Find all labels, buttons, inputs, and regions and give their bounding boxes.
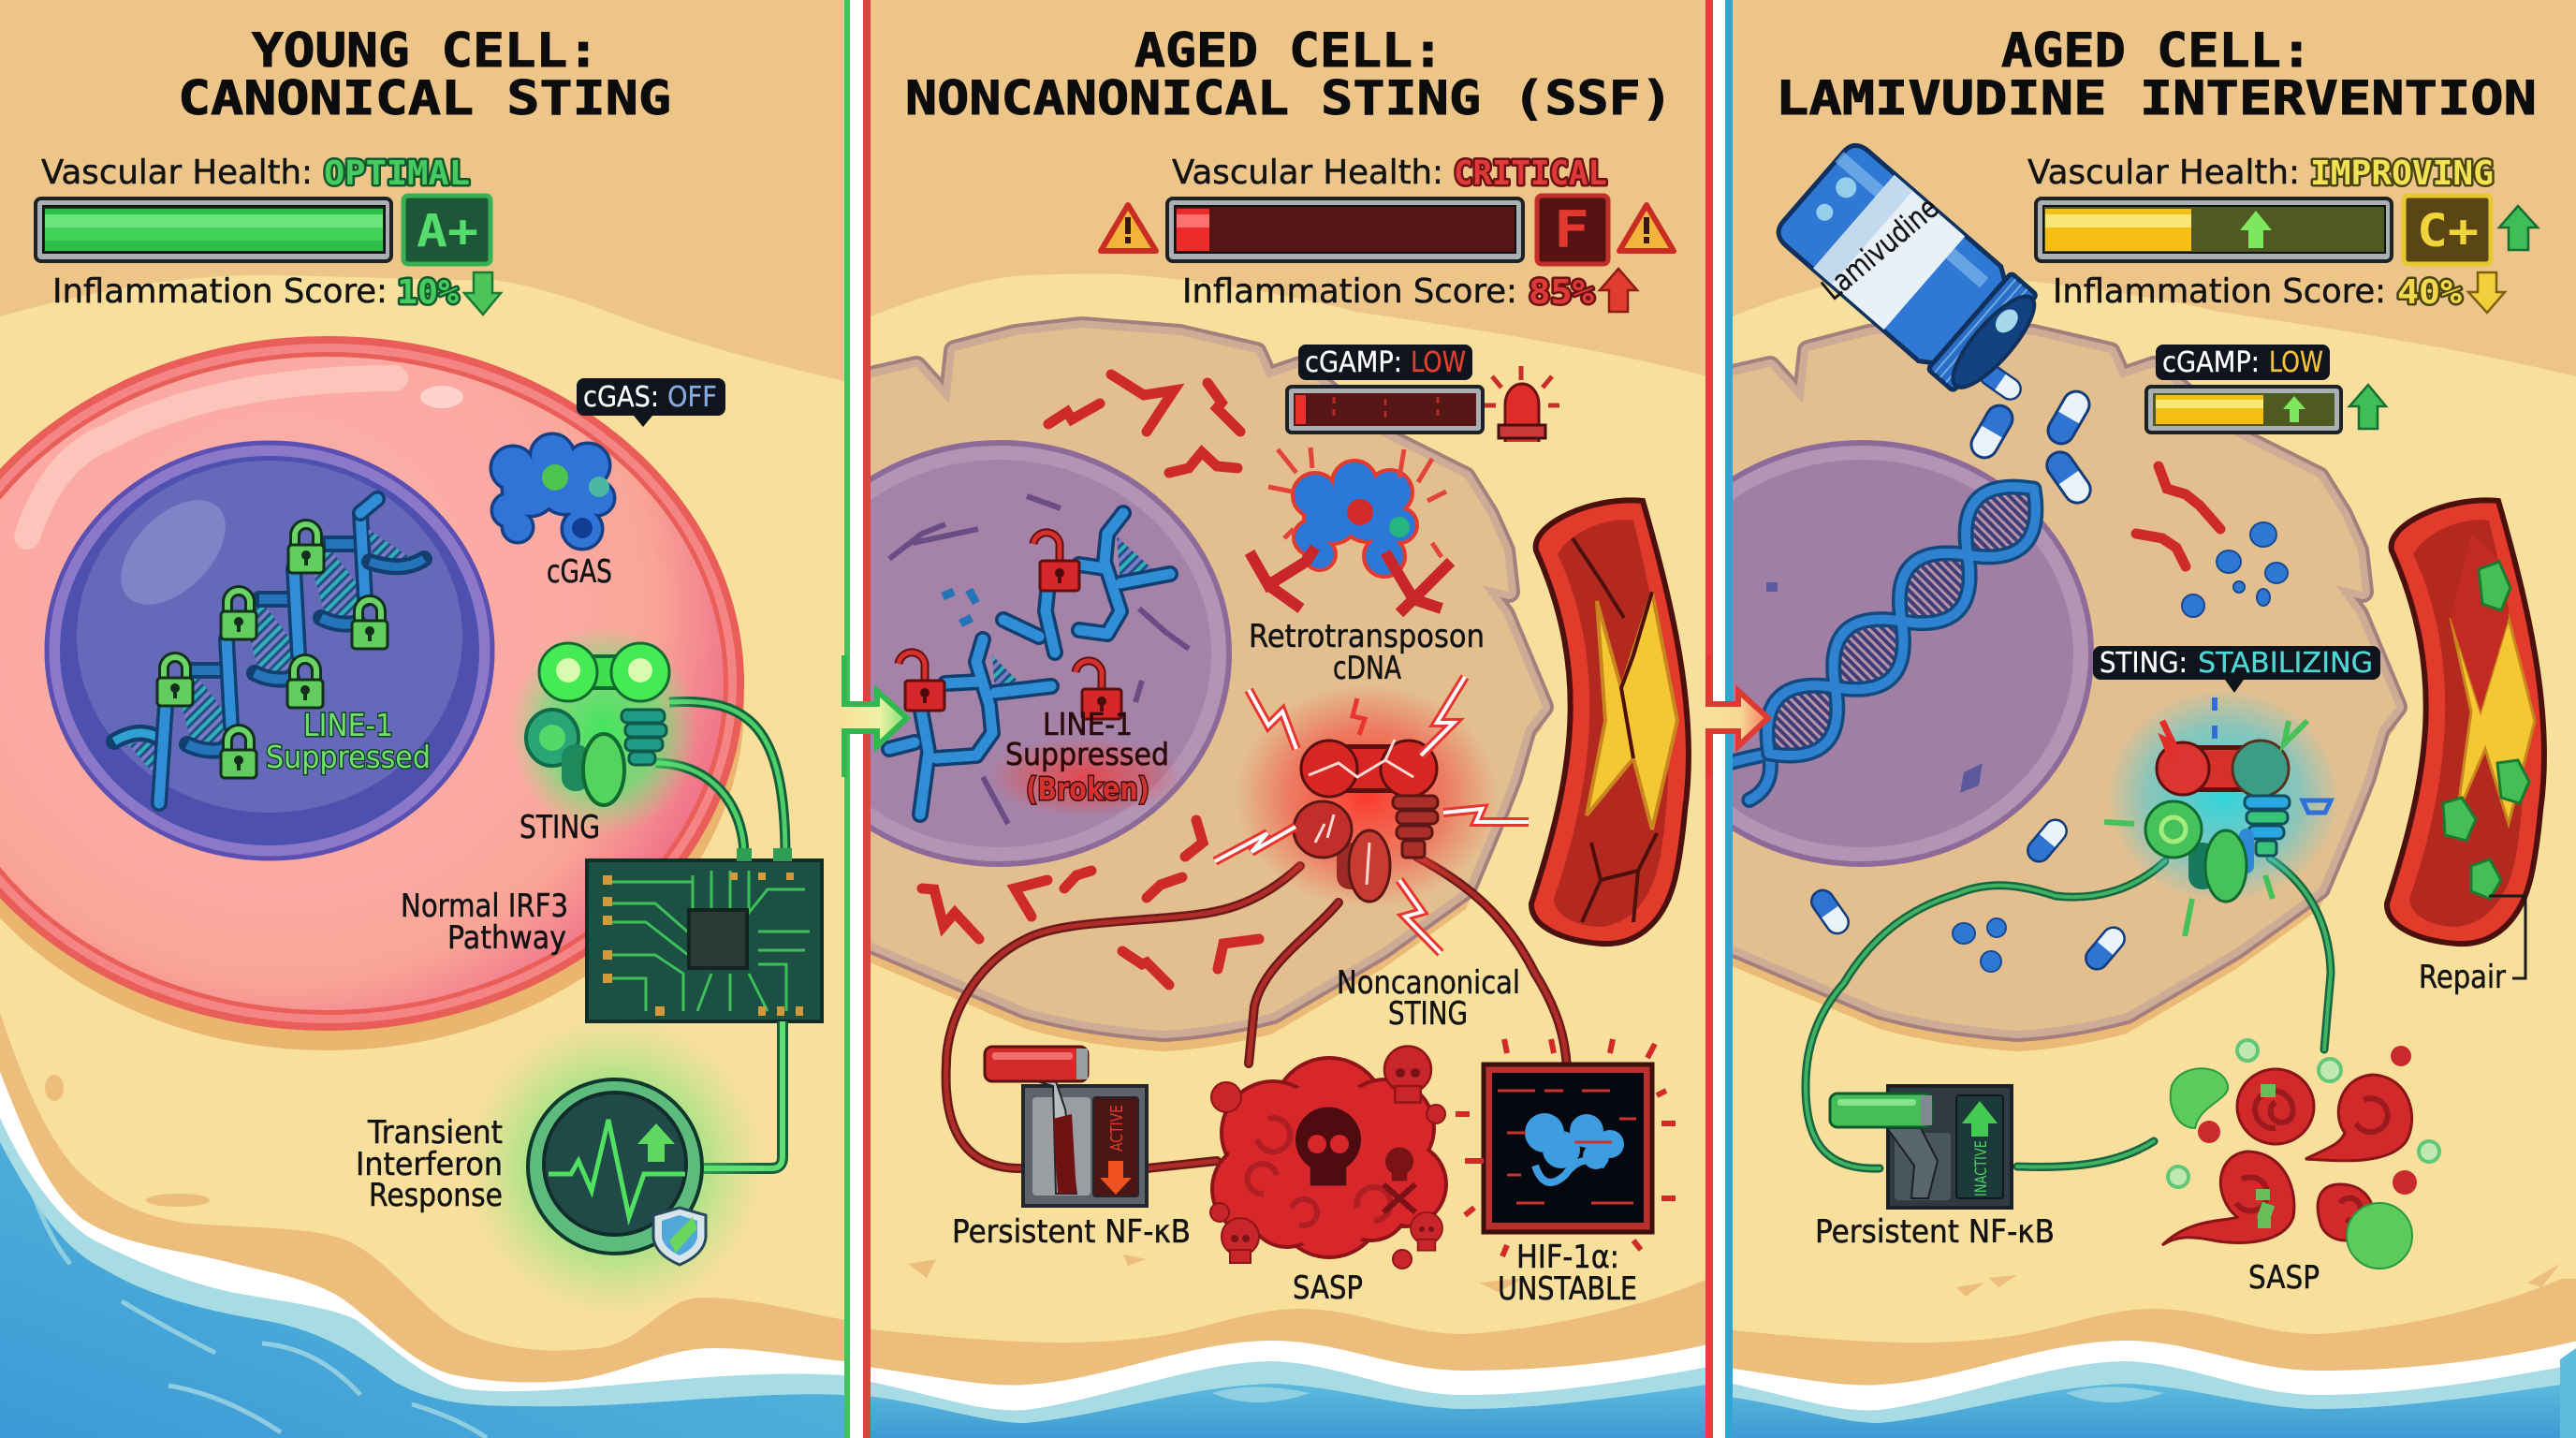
arrow: health up xyxy=(2499,206,2538,250)
tooltip: cGAMP low: cGAMP: xyxy=(1305,346,1402,379)
label: Normal IRF3 Pathway: Pathway xyxy=(447,919,566,957)
icon: SASP dissolving swirls xyxy=(2162,1040,2439,1269)
icon: interferon heartbeat monitor xyxy=(475,1022,756,1307)
label: Noncanonical STING: STING xyxy=(1388,995,1468,1033)
icon: STING active xyxy=(510,625,697,835)
health bar: full green xyxy=(36,198,391,261)
status: vascular health critical: CRITICAL xyxy=(1454,154,1607,193)
label: SASP: SASP xyxy=(2248,1259,2320,1297)
icon: STING stabilizing xyxy=(2104,688,2340,936)
tooltip: cGAS OFF: OFF xyxy=(667,381,717,414)
intact DNA helix xyxy=(1713,465,2057,810)
label: STING: STING xyxy=(520,809,600,846)
status: inflammation score 10%: Inflammation Score: xyxy=(52,272,388,311)
icon: NF-kB lever inactive: INACTIVE xyxy=(1972,1140,1991,1196)
panel: aged cell noncanonical STING xyxy=(871,0,1705,1438)
retrotransposon cDNA fragments xyxy=(922,374,1259,985)
damaged nucleus xyxy=(871,440,1232,867)
icon: NF-kB lever inactive xyxy=(1830,1086,2012,1208)
repair patches on artery xyxy=(2443,562,2529,899)
tooltip: cGAS OFF xyxy=(577,378,725,427)
cGAMP bar: low xyxy=(1287,387,1483,433)
label: Lamivudine on bottle: Lamivudine xyxy=(1815,190,1945,307)
status: vascular health optimal: Vascular Health: xyxy=(41,154,313,192)
icon: cGAS overactive with cDNA claws xyxy=(1250,448,1451,613)
label: Noncanonical STING xyxy=(1337,964,1520,1033)
status: vascular health optimal xyxy=(41,157,472,187)
icon: SASP toxic cloud xyxy=(1212,1058,1446,1257)
label: Transient Interferon Response xyxy=(356,1114,503,1214)
grade badge: C+: C+ xyxy=(2417,205,2479,257)
heading: aged noncanonical: NONCANONICAL STING (SSF) xyxy=(905,71,1673,125)
wires: stabilized signalling xyxy=(1806,858,2331,1168)
status: vascular health optimal: OPTIMAL xyxy=(324,154,470,193)
icon: NF-kB lever active xyxy=(985,1047,1147,1206)
cell membrane xyxy=(0,336,744,1050)
status: vascular health improving: IMPROVING xyxy=(2310,154,2494,193)
label: LINE-1 Suppressed: LINE-1 xyxy=(303,707,393,743)
label: Normal IRF3 Pathway xyxy=(402,891,566,955)
cGAMP bar: rising xyxy=(2146,387,2341,433)
label: HIF-1a unstable: HIF-1α: xyxy=(1516,1239,1619,1276)
recovering cell body xyxy=(1710,328,2396,1051)
label: Persistent NF-kB: Persistent NF-κB xyxy=(952,1213,1191,1251)
icon: NF-kB lever active: ACTIVE xyxy=(1107,1105,1127,1152)
label: Persistent NF-kB: Persistent NF-κB xyxy=(1815,1213,2055,1251)
label: cGAS: cGAS xyxy=(547,553,612,591)
panel 1 beach background xyxy=(0,0,844,1438)
heading: aged lamivudine xyxy=(1776,23,2537,125)
arrow: inflammation down xyxy=(2468,272,2505,313)
label: Retrotransposon cDNA xyxy=(1249,618,1485,687)
status: vascular health critical: Vascular Health: xyxy=(1172,154,1443,192)
arrow: young to aged xyxy=(844,655,907,777)
label: Retrotransposon cDNA: cDNA xyxy=(1333,650,1401,687)
icons: warning triangles xyxy=(1101,205,1674,251)
grade badge: F: F xyxy=(1554,200,1589,259)
icon: HIF-1a unstable monitor xyxy=(1456,1039,1676,1256)
arrow: aged to intervention xyxy=(1705,655,1768,777)
heading: young cell: YOUNG CELL: xyxy=(252,23,599,78)
panel: aged cell lamivudine intervention xyxy=(1632,0,2576,1438)
icons: floating skulls and droplets xyxy=(1210,1047,1445,1269)
tooltip: cGAMP low: LOW xyxy=(1411,346,1466,379)
label: LINE-1 Suppressed (Broken) xyxy=(994,712,1178,814)
status: vascular health improving xyxy=(2027,154,2494,193)
callout: repair bracket xyxy=(2489,896,2525,978)
icon: cGAS xyxy=(492,435,613,548)
DNA with locks xyxy=(114,499,424,803)
icon: noncanonical STING overactive xyxy=(1236,683,1498,908)
tooltip: STING stabilizing: STABILIZING xyxy=(2198,647,2373,680)
icon: Lamivudine bottle xyxy=(1772,138,2049,403)
heading: aged noncanonical xyxy=(905,23,1673,125)
label: LINE-1 Suppressed (Broken): LINE-1 xyxy=(1043,706,1133,742)
status: inflammation score 10% xyxy=(55,276,461,306)
arrow: inflammation up xyxy=(1600,269,1637,312)
icon: IRF3 circuit chip xyxy=(587,848,822,1021)
health bar: critical red xyxy=(1167,198,1523,261)
grade badge: A+: A+ xyxy=(417,205,478,257)
damaged cell body xyxy=(856,328,1543,1051)
panel: young cell canonical STING xyxy=(0,0,844,1438)
recovering nucleus xyxy=(1632,443,2091,864)
heading: young cell xyxy=(182,31,669,115)
label: Noncanonical STING: Noncanonical xyxy=(1337,964,1520,1002)
status: inflammation score 10%: 10% xyxy=(397,273,459,312)
label: LINE-1 Suppressed: Suppressed xyxy=(266,739,431,775)
lightning bolts around STING xyxy=(1215,677,1529,953)
heading: aged noncanonical: AGED CELL: xyxy=(1134,23,1443,78)
broken DNA fragments with open locks xyxy=(889,513,1170,814)
status: inflammation score 85%: 85% xyxy=(1529,273,1594,312)
tooltip: cGAMP low xyxy=(2156,345,2330,380)
wires: noncanonical STING signalling xyxy=(946,857,1567,1168)
status: inflammation score 85%: Inflammation Score: xyxy=(1182,272,1517,311)
wire: chip to interferon monitor xyxy=(704,1021,783,1168)
label: LINE-1 Suppressed xyxy=(266,707,431,775)
status: vascular health improving: Vascular Health: xyxy=(2027,154,2300,192)
arrow: cGAMP up xyxy=(2349,385,2386,429)
heading: aged lamivudine: AGED CELL: xyxy=(2001,23,2312,78)
grade badge: A+ xyxy=(403,196,490,264)
tooltip: cGAMP low xyxy=(1298,345,1472,380)
status: inflammation score 40%: 40% xyxy=(2397,273,2462,312)
wires: STING to IRF3 chip xyxy=(655,701,785,857)
label: Retrotransposon cDNA: Retrotransposon xyxy=(1249,618,1485,655)
label: HIF-1a unstable xyxy=(1498,1239,1637,1308)
label: LINE-1 Suppressed (Broken): (Broken) xyxy=(1026,770,1149,807)
tooltip: STING stabilizing xyxy=(2093,646,2380,693)
label: HIF-1a unstable: UNSTABLE xyxy=(1498,1270,1637,1308)
health bar: improving yellow xyxy=(2036,198,2392,261)
tooltip: cGAMP low: LOW xyxy=(2269,346,2323,379)
label: Repair: Repair xyxy=(2419,959,2506,996)
panel 2 beach background xyxy=(861,0,1732,1438)
status: vascular health critical xyxy=(1172,154,1607,193)
residual cDNA and fragments xyxy=(1953,466,2288,972)
heading: aged lamivudine: LAMIVUDINE INTERVENTION xyxy=(1776,71,2537,125)
label: Transient Interferon Response: Interferon xyxy=(356,1146,503,1183)
arrow: inflammation down xyxy=(464,272,501,315)
label: LINE-1 Suppressed (Broken): Suppressed xyxy=(1005,736,1169,772)
tooltip: cGAS OFF: cGAS: xyxy=(583,381,659,414)
icon: alarm siren xyxy=(1485,366,1559,442)
grade badge: C+ xyxy=(2404,196,2491,264)
artery: repairing xyxy=(2387,500,2544,944)
panel 3 beach background xyxy=(1715,0,2576,1438)
status: inflammation score 40%: Inflammation Score: xyxy=(2053,272,2386,311)
lamivudine pills xyxy=(1808,360,2130,974)
label: Transient Interferon Response: Response xyxy=(369,1177,503,1214)
heading: young cell: CANONICAL STING xyxy=(178,71,671,125)
tooltip: STING stabilizing: STING: xyxy=(2100,647,2188,680)
nucleus xyxy=(47,443,492,858)
grade badge: F xyxy=(1537,196,1608,264)
label: Normal IRF3 Pathway: Normal IRF3 xyxy=(401,888,568,925)
tooltip: cGAMP low: cGAMP: xyxy=(2162,346,2260,379)
label: Transient Interferon Response: Transient xyxy=(367,1114,503,1152)
label: SASP: SASP xyxy=(1293,1269,1363,1307)
artery: cracked with plaque xyxy=(1531,500,1689,944)
